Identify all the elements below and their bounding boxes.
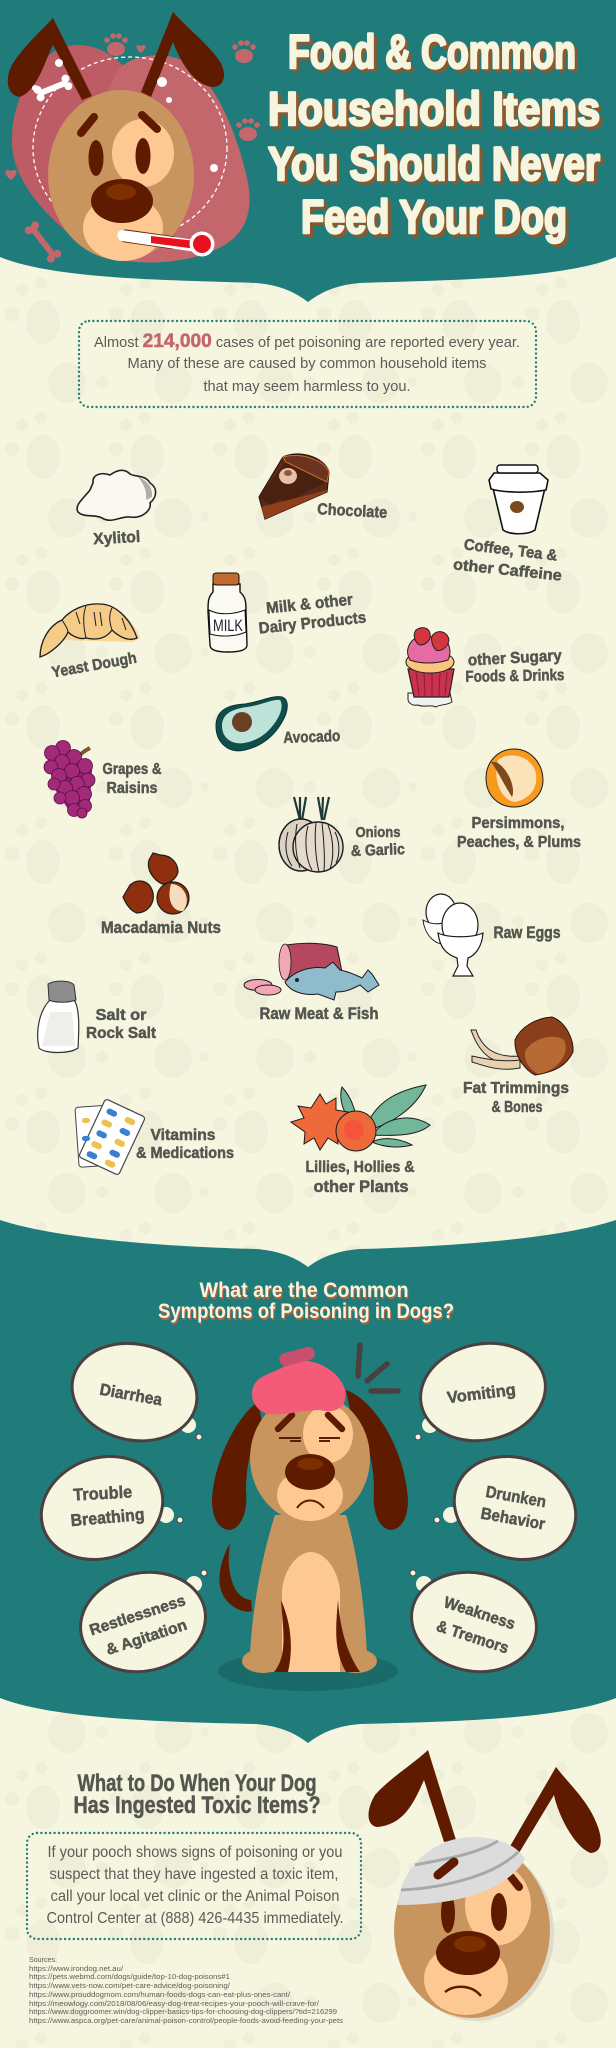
item: milk and dairy products [208,573,367,652]
panel: header banner [0,0,616,302]
callout: poisoning statistic: that may seem harmless to you. [204,379,410,395]
speech bubble: restlessness and agitation: Restlessness [87,1592,188,1639]
speech bubble: diarrhea [63,1332,206,1452]
sources list: https://www.vets-now.com/pet-care-advice/dog-poisoning/ [29,1981,231,1990]
speech bubble: drunken behavior: Behavior [479,1505,547,1534]
item: avocado: Avocado [283,728,341,747]
item: other sugary foods and drinks: Foods & Drinks [465,667,565,686]
sources list [29,1955,343,2025]
item: chocolate [259,454,388,522]
sources list: Sources: [29,1955,57,1964]
heading: common symptoms [158,1279,455,1325]
heading: common symptoms: Symptoms of Poisoning in Dogs? [158,1300,454,1323]
item: chocolate: Chocolate [317,501,388,522]
heading: common symptoms: What are the Common [200,1279,408,1302]
item: macadamia nuts: Macadamia Nuts [101,919,221,937]
item: salt or rock salt [38,981,157,1052]
sources list: https://meowlogy.com/2018/08/06/easy-dog-treat-recipes-your-pooch-will-crave-for/ [29,1999,320,2008]
title [268,25,603,246]
speech bubble: vomiting: Vomiting [446,1381,517,1407]
item: vitamins and medications: & Medications [136,1145,234,1162]
illustration: sick dog with ice bag [212,1345,408,1691]
heading: what to do [74,1770,320,1819]
item: grapes and raisins: Grapes & [102,761,162,778]
heading: common symptoms: Symptoms of Poisoning in Dogs? [159,1302,455,1325]
item: xylitol [77,470,156,548]
speech bubble: drunken behavior [434,1440,590,1576]
item: lilies, hollies and other plants: other Plants [314,1178,408,1196]
speech bubble: restlessness and agitation: & Agitation [104,1617,189,1659]
item: coffee, tea and caffeine [452,465,563,585]
illustration: sick dog with thermometer [5,12,260,264]
item: salt or rock salt: Rock Salt [86,1025,157,1042]
item: onions and garlic [279,797,405,872]
speech bubble: drunken behavior: Drunken [484,1483,547,1511]
callout: poisoning statistic: Many of these are caused by common household items [128,356,486,372]
callout: poisoning statistic [79,321,536,407]
speech bubble: weakness and tremors [402,1561,546,1683]
speech bubble: restlessness and agitation [71,1561,215,1683]
speech bubble: trouble breathing [27,1440,183,1576]
item: raw eggs [423,894,560,976]
sources list: https://www.prouddogmom.com/human-foods-dogs-can-eat-plus-ones-cant/ [29,1990,291,1999]
item: xylitol: Xylitol [93,529,141,548]
item: milk and dairy products: Milk & other [265,592,354,618]
speech bubble: trouble breathing: Trouble [73,1482,133,1505]
item: persimmons, peaches and plums [457,749,581,851]
panel: symptoms section [0,1220,616,1743]
item: other sugary foods and drinks: other Sugary [467,648,562,669]
speech bubble: weakness and tremors: Weakness [442,1594,517,1633]
sources list: https://www.doggroomer.win/dog-clipper-basics-tips-for-choosing-dog-clippers/?tid=216299 [29,2007,337,2016]
item: lilies, hollies and other plants: Lillies, Hollies & [306,1159,415,1176]
item: grapes and raisins [44,740,162,818]
callout: what to do advice: Control Center at (888) 426-4435 immediately. [46,1910,344,1927]
item: fat trimmings and bones: Fat Trimmings [463,1080,569,1097]
item: raw meat and fish [244,943,379,1023]
item: macadamia nuts [101,853,221,937]
item: raw meat and fish: Raw Meat & Fish [260,1005,378,1023]
callout: what to do advice: suspect that they have ingested a toxic item, [50,1866,338,1883]
item: grapes and raisins: Raisins [106,780,158,797]
item: fat trimmings and bones: & Bones [492,1099,543,1116]
speech bubble: diarrhea: Diarrhea [98,1381,164,1410]
callout: what to do advice: call your local vet clinic or the Animal Poison [50,1888,340,1905]
heading: common symptoms: What are the Common [200,1281,410,1304]
item: persimmons, peaches and plums: Persimmons, [472,815,564,832]
item: milk and dairy products: Dairy Products [258,609,367,638]
item: other sugary foods and drinks [406,628,565,707]
item: vitamins and medications: Vitamins [150,1127,216,1144]
item: yeast dough [40,604,140,681]
item: milk and dairy products: MILK [213,616,243,635]
heading: what to do: Has Ingested Toxic Items? [74,1792,320,1819]
item: persimmons, peaches and plums: Peaches, & Plums [457,834,581,851]
sources list: https://www.aspca.org/pet-care/animal-poison-control/people-foods-avoid-feeding-your-pets [29,2016,343,2025]
item: coffee, tea and caffeine: Coffee, Tea & [463,536,558,565]
callout: what to do advice [27,1833,361,1939]
item: fat trimmings and bones [463,1017,573,1116]
item: salt or rock salt: Salt or [96,1007,146,1024]
item: coffee, tea and caffeine: other Caffeine [452,556,563,585]
callout: what to do advice: If your pooch shows signs of poisoning or you [48,1844,342,1861]
speech bubble: trouble breathing: Breathing [70,1505,145,1530]
sources list: https://pets.webmd.com/dogs/guide/top-10-dog-poisons#1 [29,1972,230,1981]
speech bubble: weakness and tremors: & Tremors [434,1618,511,1657]
item: vitamins and medications [75,1099,234,1175]
speech bubble: vomiting [411,1332,555,1452]
item: onions and garlic: & Garlic [351,841,405,860]
heading: what to do: What to Do When Your Dog [78,1770,316,1797]
illustration: dog with bandaged head [368,1750,601,2021]
sources list: https://www.irondog.net.au/ [29,1964,124,1973]
item: raw eggs: Raw Eggs [494,924,560,942]
item: lilies, hollies and other plants [291,1085,430,1196]
callout: poisoning statistic: Almost 214,000 cases of pet poisoning are reported every year. [94,331,520,352]
item: onions and garlic: Onions [356,824,400,841]
item: yeast dough: Yeast Dough [50,650,138,681]
item: avocado [216,697,341,751]
